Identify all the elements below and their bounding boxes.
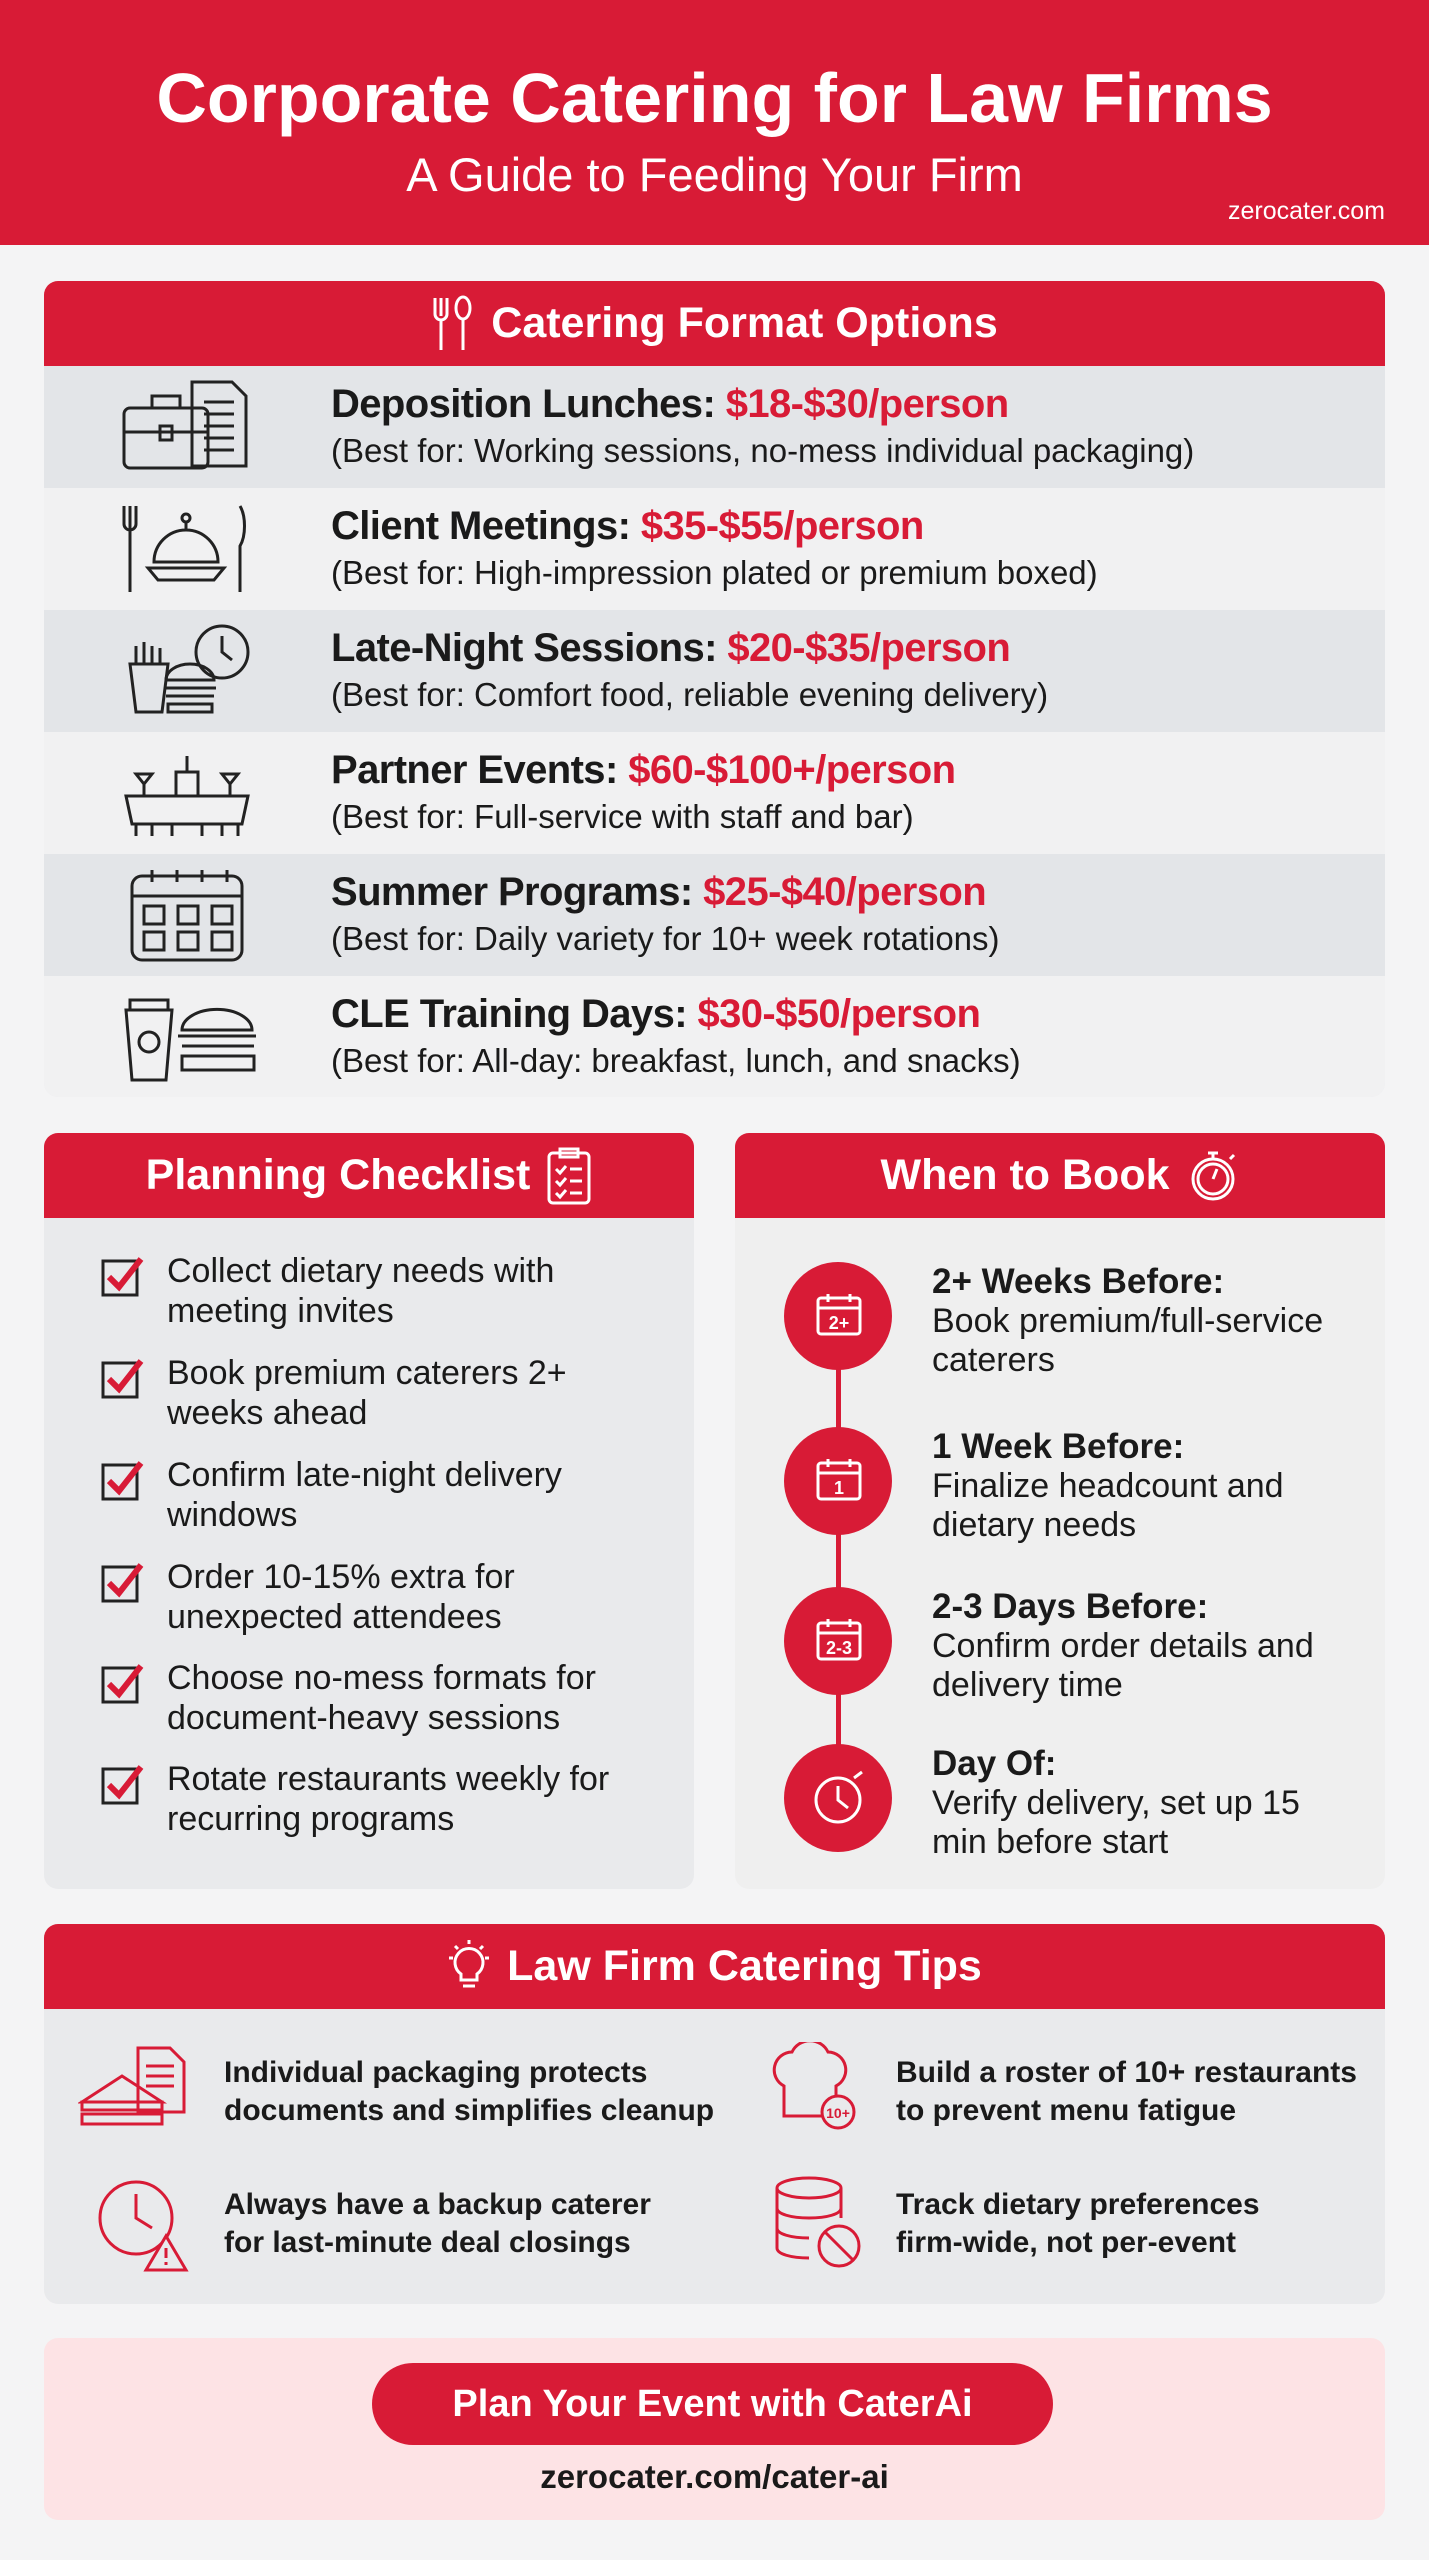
panel: planning checklist: Collect dietary needs with meeting invites [167, 1252, 554, 1330]
heading: catering tips [44, 1924, 1385, 2009]
row: summer programs: (Best for: Daily variety for 10+ week rotations) [331, 920, 1000, 957]
panel: law firm catering tips: to prevent menu fatigue [896, 2094, 1236, 2127]
heading: catering tips: Law Firm Catering Tips [507, 1942, 982, 1990]
panel: planning checklist: Order 10-15% extra for unexpected attendees [167, 1558, 515, 1636]
row: deposition lunches: (Best for: Working sessions, no-mess individual packaging) [331, 432, 1194, 469]
website: zerocater.com [1228, 197, 1385, 225]
panel: when to book: 2-3 Days Before: [932, 1587, 1208, 1626]
heading: when to book: When to Book [880, 1151, 1170, 1199]
step: 2+ weeks [784, 1262, 892, 1370]
step: 1 week [784, 1427, 892, 1535]
row: deposition lunches: Deposition Lunches: $18-$30/person [331, 382, 1009, 426]
panel: law firm catering tips: for last-minute deal closings [224, 2226, 631, 2259]
checklist item 5 [102, 1659, 596, 1737]
panel: call to action [44, 2338, 1385, 2520]
row: cle training days: CLE Training Days: $30-$50/person [331, 992, 980, 1036]
panel: planning checklist: Choose no-mess formats for document-heavy sessions [167, 1659, 596, 1737]
panel: law firm catering tips: Track dietary preferences [896, 2188, 1260, 2221]
checklist item 6 [102, 1760, 609, 1838]
row: late-night sessions: (Best for: Comfort food, reliable evening delivery) [331, 676, 1048, 713]
row: client meetings [44, 488, 1385, 610]
panel: law firm catering tips: Build a roster of 10+ restaurants [896, 2056, 1357, 2089]
panel: when to book: 1 Week Before: [932, 1427, 1184, 1466]
heading: catering format options [44, 281, 1385, 366]
icon: calendar with food [130, 870, 244, 962]
tip: roster of restaurants: 10+ [826, 2105, 850, 2121]
step: 2+ weeks: 2+ [829, 1313, 849, 1333]
panel: law firm catering tips: Always have a backup caterer [224, 2188, 651, 2221]
icon: banquet table [124, 756, 250, 836]
panel: planning checklist [44, 1133, 694, 1889]
checklist item 1 [102, 1252, 554, 1330]
panel: law firm catering tips: Individual packaging protects [224, 2056, 647, 2089]
panel: when to book: Book premium/full-service caterers [932, 1302, 1323, 1379]
checklist item 4 [102, 1558, 515, 1636]
heading: planning checklist [44, 1133, 694, 1218]
row: summer programs: Summer Programs: $25-$40/person [331, 870, 986, 914]
panel: planning checklist: Confirm late-night delivery windows [167, 1456, 562, 1534]
panel: when to book: Verify delivery, set up 15 min before start [932, 1784, 1300, 1861]
panel: planning checklist: Book premium caterers 2+ weeks ahead [167, 1354, 567, 1432]
icon: coffee and sandwich [124, 998, 256, 1082]
step: 2-3 days: 2-3 [826, 1638, 852, 1658]
tip: roster of restaurants [772, 2042, 856, 2130]
tip: individual packaging [78, 2046, 186, 2126]
row: partner events: Partner Events: $60-$100+/person [331, 748, 955, 792]
icon: burger fries clock [128, 624, 250, 714]
row: client meetings: (Best for: High-impression plated or premium boxed) [331, 554, 1098, 591]
row: deposition lunches [44, 366, 1385, 488]
tip: backup caterer [98, 2180, 189, 2272]
cta button [372, 2363, 1053, 2445]
panel: when to book: Confirm order details and delivery time [932, 1627, 1314, 1704]
heading: catering format options: Catering Format Options [491, 299, 998, 347]
icon: briefcase and document [122, 380, 248, 470]
row: client meetings: Client Meetings: $35-$55/person [331, 504, 924, 548]
timeline connector [836, 1323, 841, 1793]
checklist item 2 [102, 1354, 567, 1432]
panel: when to book: 2+ Weeks Before: [932, 1262, 1224, 1301]
heading: when to book [735, 1133, 1385, 1218]
row: cle training days: (Best for: All-day: breakfast, lunch, and snacks) [331, 1042, 1021, 1079]
panel: law firm catering tips: documents and simplifies cleanup [224, 2094, 714, 2127]
panel: catering format options [44, 281, 1385, 1097]
cta url: zerocater.com/cater-ai [540, 2458, 889, 2495]
header banner [0, 0, 1429, 245]
heading: planning checklist: Planning Checklist [146, 1151, 530, 1199]
panel: law firm catering tips: firm-wide, not per-event [896, 2226, 1236, 2259]
subtitle: A Guide to Feeding Your Firm [406, 148, 1023, 201]
checklist item 3 [102, 1456, 562, 1534]
row: partner events: (Best for: Full-service with staff and bar) [331, 798, 914, 835]
step: day of [784, 1744, 892, 1852]
panel: when to book: Day Of: [932, 1744, 1056, 1783]
panel: when to book: Finalize headcount and dietary needs [932, 1467, 1284, 1544]
panel: when to book [735, 1133, 1385, 1889]
row: late-night sessions [44, 610, 1385, 732]
row: summer programs [44, 854, 1385, 976]
row: partner events [44, 732, 1385, 854]
cta button: Plan Your Event with CaterAi [452, 2382, 973, 2424]
tip: dietary preferences [776, 2176, 860, 2268]
row: cle training days [44, 976, 1385, 1098]
step: 2-3 days [784, 1587, 892, 1695]
panel: law firm catering tips [44, 1924, 1385, 2304]
title: Corporate Catering for Law Firms [156, 59, 1273, 137]
panel: planning checklist: Rotate restaurants weekly for recurring programs [167, 1760, 609, 1838]
step: 1 week: 1 [834, 1478, 844, 1498]
row: late-night sessions: Late-Night Sessions: $20-$35/person [331, 626, 1010, 670]
icon: cloche with cutlery [122, 505, 246, 592]
